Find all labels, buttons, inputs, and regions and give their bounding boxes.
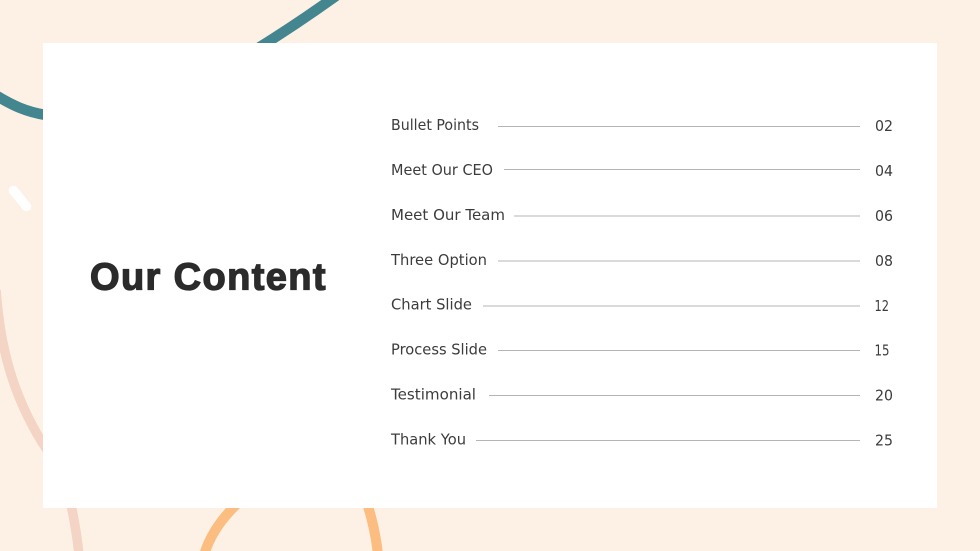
row: Meet Our Team: 06: [875, 207, 893, 225]
title: Our Content: [90, 256, 326, 298]
row: Testimonial: Testimonial: [390, 386, 476, 404]
row: Meet Our CEO: 04: [875, 162, 893, 180]
row: Process Slide: [391, 340, 890, 360]
row: Three Option: [390, 251, 893, 270]
row: Meet Our CEO: [391, 161, 893, 180]
row: Testimonial: [390, 386, 893, 404]
table of contents: [390, 116, 893, 450]
row: Bullet Points: [391, 116, 893, 135]
row: Chart Slide: 12: [874, 297, 889, 315]
decorative white dash: [14, 190, 26, 206]
row: Meet Our CEO: Meet Our CEO: [391, 161, 493, 179]
decorative teal curve: top: [255, 0, 336, 50]
row: Meet Our Team: Meet Our Team: [391, 206, 505, 224]
row: Meet Our Team: [391, 206, 893, 225]
white panel: [43, 43, 937, 508]
row: Thank You: Thank You: [390, 430, 466, 448]
row: Bullet Points: 02: [875, 117, 893, 135]
row: Chart Slide: Chart Slide: [391, 296, 472, 314]
row: Three Option: Three Option: [390, 251, 487, 269]
row: Three Option: 08: [875, 252, 893, 270]
row: Process Slide: 15: [874, 342, 890, 360]
row: Process Slide: Process Slide: [391, 340, 487, 358]
row: Thank You: [390, 430, 893, 450]
row: Testimonial: 20: [875, 386, 893, 404]
decorative teal curve: left: [0, 96, 46, 115]
row: Chart Slide: [391, 296, 889, 315]
decorative pink curve: bottom: [70, 500, 79, 551]
row: Bullet Points: Bullet Points: [391, 116, 479, 134]
row: Thank You: 25: [875, 432, 893, 450]
decorative orange curve: bottom right: [366, 500, 378, 551]
decorative pink curve: left: [0, 290, 47, 450]
decorative orange curve: bottom left: [204, 503, 238, 551]
